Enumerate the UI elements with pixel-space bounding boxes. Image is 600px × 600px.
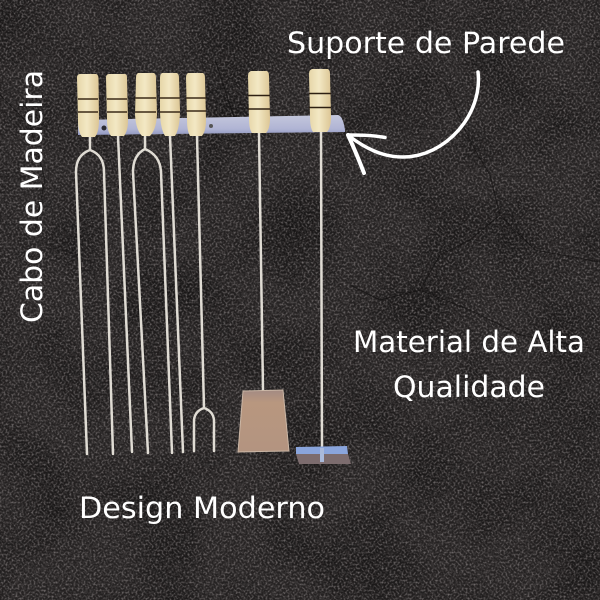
shovel head [238,390,289,452]
label: Material de Alta Qualidade: Material de Alta [353,325,585,359]
handle 2 [106,74,128,136]
handle 5 [186,73,206,136]
single skewer 2 [118,136,132,452]
single skewer 4 [170,136,183,452]
label: Material de Alta Qualidade: Qualidade [393,370,545,404]
label: Material de Alta Qualidade [353,325,585,404]
label: Suporte de Parede: Suporte de Parede [287,26,565,60]
shovel handle [259,133,263,390]
label: Cabo de Madeira: Cabo de Madeira [15,70,49,323]
handle 6 [248,71,270,133]
wall mount bracket [78,115,345,135]
wooden handles [77,69,331,137]
skewers and forks [76,132,322,454]
handle 7 [309,69,331,132]
arrow pointing to the bracket [348,72,478,173]
handle 1 [77,74,99,137]
double-prong skewer 1 [76,136,113,454]
label: Design Moderno: Design Moderno [79,491,325,525]
small fork [194,136,214,451]
double-prong skewer 3 [133,136,172,453]
handle 4 [160,73,180,136]
handle 3 [135,73,157,136]
scraper handle [321,132,322,450]
scraper blade [296,446,351,464]
